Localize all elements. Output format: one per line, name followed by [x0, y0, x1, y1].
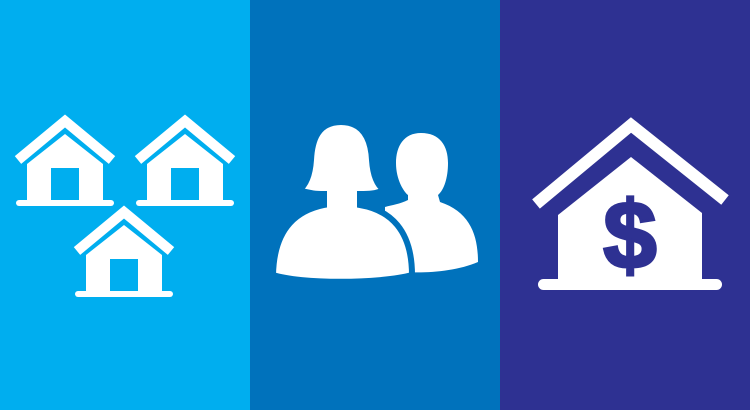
panel: home value	[500, 0, 750, 410]
panel: houses	[0, 0, 250, 410]
icon: house with dollar sign	[536, 125, 725, 290]
dollar sign: $	[603, 182, 657, 289]
icon: house top-left	[16, 121, 114, 206]
icon: house bottom	[75, 212, 173, 297]
icon: house top-right	[136, 121, 234, 206]
panel: people	[250, 0, 500, 410]
icon: woman	[273, 122, 412, 282]
icon: man	[385, 133, 478, 272]
